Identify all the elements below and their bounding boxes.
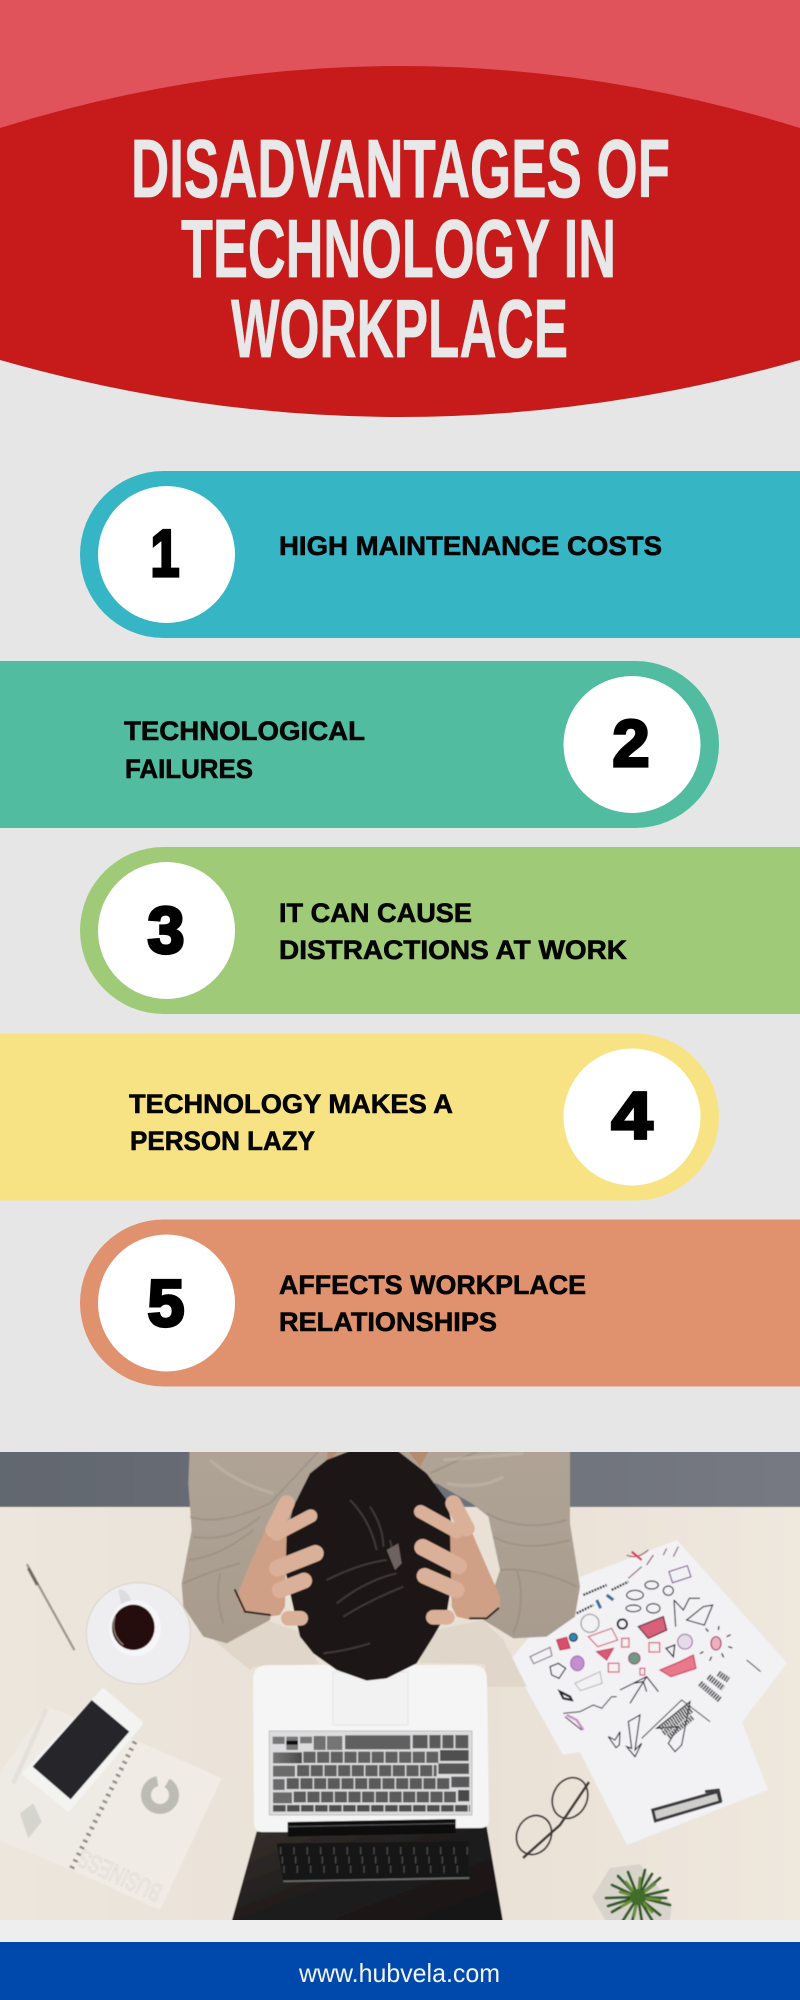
panel: item 2	[0, 661, 719, 828]
notebook and phone	[0, 1692, 222, 1910]
person: sweater and arms	[182, 1440, 580, 1643]
panel: item 1: 1	[150, 516, 180, 590]
glasses	[515, 1776, 590, 1860]
person: hair	[282, 1448, 457, 1681]
lower light band	[0, 1920, 800, 1942]
panel: item 2: 2	[612, 706, 650, 780]
panel: item 1: HIGH MAINTENANCE COSTS	[279, 531, 662, 561]
header red banner with title	[0, 66, 800, 417]
panel: item 1	[80, 471, 800, 638]
base	[253, 1665, 489, 1832]
clip	[653, 1790, 721, 1821]
panel: item 5: 5	[148, 1266, 184, 1340]
footer bar	[0, 1942, 800, 2000]
panel: item 2: TECHNOLOGICAL	[124, 716, 365, 746]
keyboard	[269, 1731, 472, 1815]
sketches	[530, 1547, 761, 1757]
panel: item 3: IT CAN CAUSE	[279, 898, 472, 928]
website url: www.hubvela.com	[298, 1958, 500, 1988]
panel: item 3	[80, 847, 800, 1014]
desk shadow	[213, 1620, 527, 1687]
header background	[0, 0, 800, 200]
panel: item 3: 3	[148, 893, 184, 967]
panel: item 3: DISTRACTIONS AT WORK	[279, 935, 628, 965]
panel: item 4: 4	[612, 1078, 653, 1152]
title	[131, 122, 670, 375]
panel: item 4: PERSON LAZY	[130, 1126, 315, 1156]
title: WORKPLACE	[231, 282, 568, 375]
panel: item 2: FAILURES	[125, 754, 253, 784]
panel: item 5: AFFECTS WORKPLACE	[279, 1270, 586, 1300]
laptop	[228, 1665, 505, 1933]
photo: stressed person at desk	[0, 1440, 800, 1933]
panel: item 4	[0, 1034, 719, 1200]
coffee cup on saucer	[86, 1583, 190, 1684]
panel: item 4: TECHNOLOGY MAKES A	[129, 1089, 453, 1119]
person: hands	[235, 1503, 500, 1619]
notebook and phone: BUSINESS	[73, 1844, 166, 1908]
hinge	[288, 1819, 456, 1837]
panel: item 5: RELATIONSHIPS	[279, 1307, 497, 1337]
screen	[231, 1826, 504, 1920]
panel: item 5	[80, 1220, 800, 1386]
clipboard with sketches	[510, 1540, 787, 1845]
plant	[592, 1864, 672, 1920]
pen	[27, 1565, 74, 1649]
trackpad	[333, 1672, 408, 1725]
